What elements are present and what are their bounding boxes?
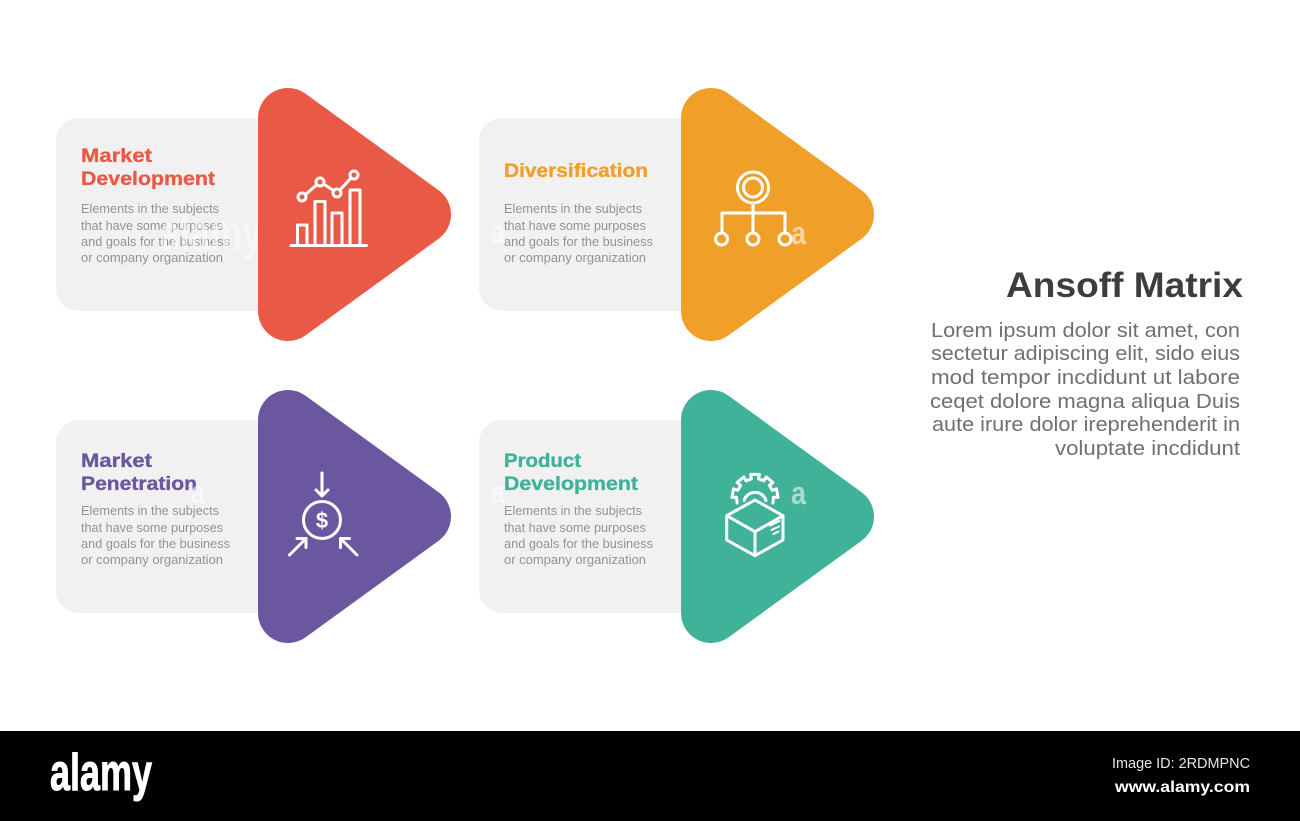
body text <box>504 504 653 567</box>
logo: alamy <box>50 744 152 802</box>
triangle <box>711 118 844 311</box>
body text <box>504 202 653 265</box>
description text: sectetur adipiscing elit, sido eius <box>931 343 1240 365</box>
body text: that have some purposes <box>504 219 646 233</box>
body text: or company organization <box>504 553 646 567</box>
body text <box>81 504 230 567</box>
heading: Development <box>504 473 639 495</box>
watermark fragment: a <box>791 475 806 511</box>
body text: Elements in the subjects <box>81 202 219 216</box>
heading: Market <box>81 145 153 167</box>
card background <box>56 420 276 613</box>
body text: that have some purposes <box>81 219 223 233</box>
watermark fragment: a <box>491 474 505 510</box>
description text: mod tempor incdidunt ut labore <box>931 367 1240 389</box>
watermark fragment: alamy <box>160 205 262 261</box>
watermark fragment: a <box>791 215 806 251</box>
body text: Elements in the subjects <box>504 504 642 518</box>
heading: Diversification <box>504 160 648 182</box>
icon: gear and box <box>727 474 783 556</box>
description text: ceqet dolore magna aliqua Duis <box>930 391 1240 413</box>
body text: and goals for the business <box>81 235 230 249</box>
card background <box>479 420 699 613</box>
heading <box>81 450 197 495</box>
panel: diversification <box>479 118 844 311</box>
footer bar <box>0 731 1300 821</box>
card background <box>56 118 276 311</box>
body text: Elements in the subjects <box>504 202 642 216</box>
heading <box>504 450 639 495</box>
heading: Product <box>504 450 582 472</box>
icon: dollar coin with inward arrows <box>290 473 357 555</box>
body text: and goals for the business <box>504 537 653 551</box>
triangle <box>288 118 421 311</box>
triangle <box>711 420 844 613</box>
heading <box>81 145 216 190</box>
body text: that have some purposes <box>81 521 223 535</box>
description text: aute irure dolor ireprehenderit in <box>932 414 1240 436</box>
heading: Market <box>81 450 153 472</box>
watermark fragment: a <box>491 214 505 250</box>
body text: and goals for the business <box>81 537 230 551</box>
body text: that have some purposes <box>504 521 646 535</box>
body text: and goals for the business <box>504 235 653 249</box>
watermark fragment: a <box>191 474 205 510</box>
panel: product development <box>479 420 844 613</box>
body text <box>81 202 230 265</box>
panel: market penetration <box>56 420 421 613</box>
heading: Penetration <box>81 473 197 495</box>
description text <box>930 320 1240 460</box>
icon: hierarchy <box>716 172 791 245</box>
description text: voluptate incdidunt <box>1055 438 1240 460</box>
icon: bar chart with trend line <box>291 171 366 246</box>
website: www.alamy.com <box>1114 779 1250 796</box>
description text: Lorem ipsum dolor sit amet, con <box>931 320 1240 342</box>
body text: or company organization <box>504 251 646 265</box>
body text: or company organization <box>81 553 223 567</box>
card background <box>479 118 699 311</box>
icon: dollar coin with inward arrows: $ <box>316 508 328 533</box>
body text: Elements in the subjects <box>81 504 219 518</box>
body text: or company organization <box>81 251 223 265</box>
heading: Development <box>81 168 216 190</box>
triangle <box>288 420 421 613</box>
image id: Image ID: 2RDMPNC <box>1112 756 1250 772</box>
panel: market development <box>56 118 421 311</box>
title: Ansoff Matrix <box>1006 266 1244 305</box>
